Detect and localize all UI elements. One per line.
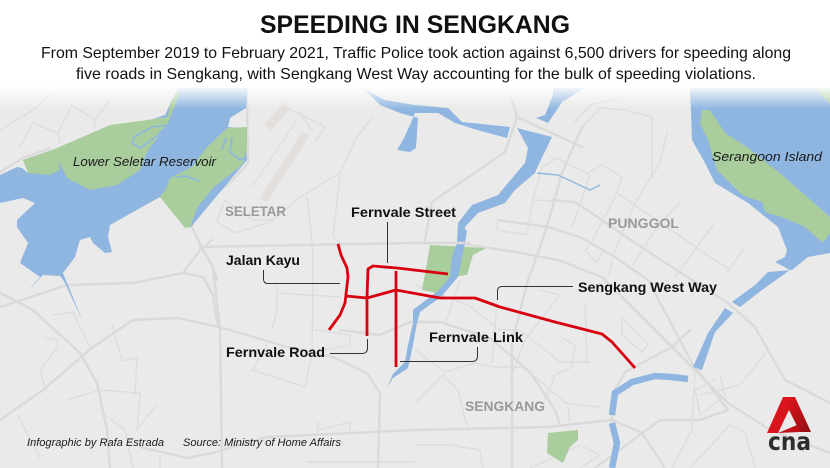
map: Seletar airfield — [252, 102, 325, 202]
intro text: five roads in Sengkang, with Sengkang West Way accounting for the bulk of speeding violations. — [76, 66, 756, 83]
map: Lower Seletar park east — [160, 127, 247, 228]
map: lower river channels — [612, 308, 733, 468]
map: thin Punggol canal — [537, 173, 600, 190]
callout: Jalan Kayu: Jalan Kayu — [226, 252, 300, 268]
map: Serangoon water — [690, 88, 830, 307]
map: Fernvale park — [422, 245, 486, 293]
place label: Lower Seletar Reservoir: Lower Seletar Reservoir — [73, 154, 217, 169]
map: corner green — [815, 88, 830, 104]
map: Serangoon Island — [700, 110, 830, 243]
callout: Fernvale Street: Fernvale Street — [351, 204, 456, 220]
callout: Fernvale Link: Fernvale Link — [429, 329, 523, 345]
logo: CNA: cna — [768, 427, 811, 456]
callout: Sengkang West Way — [498, 279, 717, 300]
intro text: From September 2019 to February 2021, Traffic Police took action against 6,500 drivers for speeding along — [41, 45, 791, 62]
red road: Jalan Kayu — [329, 244, 348, 330]
red road: Fernvale Street — [367, 266, 448, 336]
map: central river — [387, 128, 552, 388]
title: SPEEDING IN SENGKANG — [260, 11, 570, 39]
credits: Infographic by Rafa Estrada — [27, 437, 164, 449]
map: Lower Seletar Reservoir water — [0, 88, 248, 322]
map: river over park — [436, 230, 467, 293]
area label: Punggol: PUNGGOL — [608, 215, 679, 231]
callout: Fernvale Road — [226, 339, 368, 360]
map: northern river — [363, 88, 510, 152]
callout: Sengkang West Way: Sengkang West Way — [578, 279, 717, 295]
map: reservoir inlets — [132, 125, 244, 181]
credits — [27, 437, 341, 449]
map: roads — [0, 95, 830, 468]
logo: CNA — [767, 397, 811, 456]
area label: Sengkang: SENGKANG — [465, 398, 545, 414]
callout: Jalan Kayu — [226, 252, 340, 284]
credits: Source: Ministry of Home Affairs — [183, 437, 341, 449]
map: road over river — [425, 242, 470, 244]
area label: Seletar: SELETAR — [225, 203, 286, 219]
map: river mouth strip — [536, 88, 585, 123]
place label: Serangoon Island: Serangoon Island — [712, 149, 823, 164]
callout: Fernvale Street — [351, 204, 456, 263]
top fade gradient — [0, 85, 830, 109]
intro text — [41, 45, 791, 83]
map: Lower Seletar park west — [23, 88, 180, 190]
red road: Fernvale Link — [395, 271, 397, 367]
top fade — [0, 76, 830, 85]
map: Sengkang park — [547, 430, 578, 463]
red road: Sengkang West Way — [346, 290, 635, 368]
callout: Fernvale Link — [400, 329, 523, 362]
callout: Fernvale Road: Fernvale Road — [226, 344, 325, 360]
